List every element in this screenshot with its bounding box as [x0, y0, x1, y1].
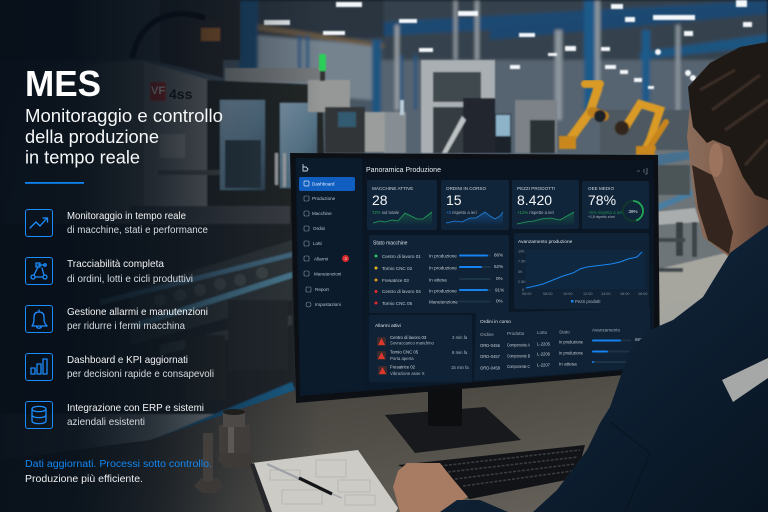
feature: monitoraggio: di macchine, stati e performance	[67, 224, 208, 236]
KPI card: Macchine attive: 28	[372, 192, 388, 208]
beard	[692, 165, 733, 254]
panel: Ordini in corso	[474, 308, 650, 381]
neck and face	[687, 90, 768, 256]
table row 2: ORD-0457	[480, 354, 500, 359]
keyboard	[398, 445, 585, 499]
percentages	[494, 252, 504, 304]
hair	[688, 42, 768, 200]
subtitle: in tempo reale	[25, 148, 140, 168]
chart axis labels: 08:00	[543, 292, 553, 296]
machine names: Fresatrice 03	[382, 278, 409, 283]
sidebar	[296, 158, 363, 393]
subtitle: Monitoraggio e controllo	[25, 106, 223, 126]
alarm descriptions: Porta aperta	[390, 356, 414, 361]
nav labels: Produzione	[312, 196, 336, 201]
nav labels: Allarmi	[314, 256, 328, 262]
table row 2: L-2206	[537, 352, 550, 356]
feature: integrazione	[26, 402, 204, 428]
KPI card: Macchine attive: MACCHINE ATTIVE	[372, 186, 413, 191]
table row 1: In produzione	[559, 340, 583, 344]
machine statuses: In attesa	[429, 278, 447, 282]
alarm times: 15 min fa	[451, 365, 469, 370]
icon: trend line	[26, 210, 52, 236]
alarm descriptions: Fresatrice 02	[390, 364, 416, 370]
table header: Prodotto	[507, 331, 525, 336]
table row 1: Componente A	[507, 342, 531, 348]
KPI card: Pezzi prodotti: +12% rispetto a ieri	[517, 210, 554, 215]
panel: Ordini in corso: Ordini in corso	[480, 319, 511, 325]
nav labels	[312, 196, 341, 307]
machine names: Centro di lavoro 04	[382, 289, 421, 294]
subtitle	[25, 106, 223, 168]
feature: tracciabilità	[26, 258, 193, 285]
machine statuses: In produzione	[429, 266, 457, 270]
feature: integrazione: Integrazione con ERP e sistemi	[67, 402, 204, 414]
feature: monitoraggio: Monitoraggio in tempo reale	[67, 210, 186, 222]
icon: bell	[26, 306, 52, 332]
feature: tracciabilità: Tracciabilità completa	[67, 258, 164, 270]
KPI card: OEE medio: OEE MEDIO	[588, 186, 614, 191]
sparkline	[446, 212, 503, 226]
KPI card: Pezzi prodotti: 8.420	[517, 192, 552, 208]
sparkline	[517, 212, 574, 226]
ceiling lights	[264, 0, 752, 89]
alarm descriptions: Vibrazione asse X	[390, 371, 425, 376]
machine statuses: In produzione	[429, 288, 457, 294]
jacket pocket	[610, 422, 650, 512]
OEE ring: 39%	[628, 209, 638, 214]
table row 2: Componente B	[507, 354, 530, 358]
hair strands	[700, 70, 768, 165]
table row 1: 65%	[635, 337, 644, 342]
active item: Dashboard: Dashboard	[312, 182, 335, 186]
table row 1: L-2205	[537, 342, 550, 346]
sparkline	[373, 212, 432, 226]
ear	[709, 143, 723, 177]
chart axis labels	[518, 250, 648, 296]
alarm descriptions: Sovraccarico mandrino	[390, 340, 435, 346]
chart axis labels: 5K	[518, 270, 523, 274]
table row 3: ORD-0458	[480, 366, 500, 370]
alarm descriptions	[390, 335, 435, 376]
table header: Lotto	[537, 330, 548, 335]
chart axis labels: 7.5K	[518, 260, 526, 264]
nav labels: Macchine	[312, 211, 332, 216]
accent divider	[25, 182, 84, 184]
orange robots	[559, 84, 666, 155]
chart axis labels: 10K	[518, 250, 525, 254]
alarm icons	[377, 337, 387, 375]
KPI card: OEE medio	[582, 181, 649, 229]
desk items	[194, 409, 585, 512]
nav labels: Impostazioni	[315, 302, 341, 307]
KPI card: Macchine attive	[367, 180, 437, 230]
machine label text	[151, 85, 193, 102]
feature: dashboard: per decisioni rapide e consapevoli	[67, 368, 214, 380]
alarm times	[451, 335, 469, 370]
reflective stripe	[722, 358, 768, 402]
KPI card: Ordini in corso: 15	[446, 192, 462, 208]
status bars	[459, 254, 491, 302]
conveyor and steel tables at right	[655, 150, 730, 400]
percentages: 52%	[494, 264, 503, 269]
active item: Dashboard	[299, 177, 355, 191]
icon: bar chart	[26, 354, 52, 380]
machine label text: 4ss	[169, 86, 193, 102]
chart axis labels: 06:00	[522, 292, 532, 296]
feature: dashboard	[26, 354, 214, 380]
percentages: 91%	[495, 288, 504, 292]
footer tagline: Produzione più efficiente.	[25, 473, 143, 485]
chart axis labels: 12:00	[583, 292, 593, 296]
KPI card: OEE medio: +1,8 rispetto a ieri	[588, 215, 615, 219]
machine statuses	[429, 254, 458, 304]
alarm times: 3 min fa	[452, 335, 468, 340]
KPI card: Pezzi prodotti	[512, 180, 579, 229]
monitor with dashboard	[290, 153, 660, 403]
monitor stand	[385, 388, 521, 453]
feature: integrazione: aziendali esistenti	[67, 416, 145, 428]
title: MES	[25, 63, 101, 104]
white machine in hall	[384, 60, 690, 154]
KPI card: OEE medio: +5% rispetto a ieri	[588, 210, 623, 215]
panel: Allarmi attivi: Allarmi attivi	[375, 323, 401, 329]
chart axis labels: 2.5K	[518, 280, 526, 284]
pen	[267, 464, 342, 498]
chart legend: Pezzi prodotti	[575, 299, 600, 304]
monitor frame	[290, 153, 660, 403]
KPI card: Ordini in corso: ORDINI IN CORSO	[446, 186, 486, 191]
jacket	[440, 225, 768, 512]
machine statuses: Manutenzione	[429, 300, 458, 304]
metal part small	[194, 433, 224, 493]
KPI card: Pezzi prodotti: PEZZI PRODOTTI	[517, 186, 555, 191]
KPI card: Ordini in corso: +3 rispetto a ieri	[446, 210, 477, 215]
sidebar logo	[303, 164, 308, 171]
alarm descriptions: Tornio CNC 05	[390, 350, 419, 354]
status dots	[374, 254, 378, 304]
nav labels: Ordini	[313, 226, 325, 231]
feature: allarmi	[26, 306, 208, 332]
table row 3: Componente C	[507, 364, 531, 369]
table row 1: ORD-0456	[480, 343, 500, 348]
alarm times: 8 min fa	[452, 350, 468, 355]
machine names: Tornio CNC 02	[382, 266, 413, 271]
table header: Ordine	[480, 332, 494, 337]
table row 3: L-2207	[537, 362, 550, 368]
CNC machine	[0, 0, 385, 240]
table row 3	[480, 358, 642, 370]
machine names: Centro di lavoro 01	[382, 254, 421, 259]
panel: Stato macchine	[369, 235, 509, 313]
KPI card: OEE medio: 78%	[588, 192, 616, 208]
nav labels: Lotti	[313, 241, 322, 246]
machine names	[382, 254, 421, 306]
dashboard title: Panoramica Produzione	[366, 165, 441, 174]
footer tagline	[25, 458, 212, 485]
nav labels: Manutenzioni	[314, 272, 341, 276]
chart axis labels: 14:00	[601, 292, 611, 296]
table header: Stato	[559, 330, 570, 334]
metal part large	[218, 409, 255, 468]
chart axis labels: 10:00	[563, 292, 573, 296]
lower machine bed with rails	[0, 224, 296, 452]
chart axis labels: 18:00	[638, 292, 648, 296]
chart axis labels: 0	[522, 288, 524, 292]
subtitle: della produzione	[25, 127, 159, 147]
table row 2	[480, 348, 644, 359]
panel: Avanzamento produzione	[514, 233, 649, 309]
left text panel	[25, 63, 223, 485]
operator seen from behind	[440, 42, 768, 512]
table row 1	[480, 337, 644, 348]
machine label text: VF	[151, 85, 165, 97]
notebook with sketches	[250, 450, 398, 512]
line chart	[526, 250, 645, 289]
feature: allarmi: per ridurre i fermi macchina	[67, 320, 185, 332]
nav items	[304, 196, 311, 307]
KPI card: Macchine attive: 72% sul totale	[372, 210, 400, 215]
table header: Avanzamento	[592, 328, 620, 332]
KPI card: Ordini in corso	[441, 180, 509, 230]
table row 3: 5%	[635, 358, 642, 364]
screen	[295, 158, 654, 396]
table row 2: In produzione	[559, 350, 583, 356]
stand base	[385, 407, 521, 453]
feature: dashboard: Dashboard e KPI aggiornati	[67, 354, 188, 366]
alarm badge	[342, 255, 349, 262]
alarm badge: 3	[344, 256, 348, 261]
panel: Avanzamento produzione: Avanzamento produzione	[518, 239, 573, 245]
alarm descriptions: Centro di lavoro 03	[390, 335, 427, 340]
panel: Allarmi attivi	[369, 315, 472, 382]
feature: allarmi: Gestione allarmi e manutenzioni	[67, 306, 208, 318]
percentages: 86%	[494, 252, 503, 258]
machine names: Tornio CNC 05	[382, 301, 413, 306]
chart axis labels: 16:00	[620, 292, 630, 296]
table header	[480, 328, 620, 337]
table row 2: 40%	[635, 348, 644, 353]
feature: monitoraggio	[26, 210, 208, 236]
window controls	[637, 168, 647, 174]
floor behind desk	[0, 360, 700, 512]
percentages: 0%	[496, 276, 503, 281]
icon: database	[26, 402, 52, 428]
nav labels: Report	[315, 287, 330, 292]
table row 3: In attesa	[559, 362, 577, 366]
footer tagline: Dati aggiornati. Processi sotto controllo.	[25, 458, 212, 470]
icon: network nodes	[26, 258, 52, 284]
feature: tracciabilità: di ordini, lotti e cicli produttivi	[67, 273, 193, 285]
percentages: 0%	[496, 298, 503, 304]
panel: Stato macchine: Stato macchine	[373, 240, 408, 246]
stand neck	[428, 388, 462, 426]
hand	[393, 463, 468, 512]
machine statuses: In produzione	[429, 254, 457, 258]
